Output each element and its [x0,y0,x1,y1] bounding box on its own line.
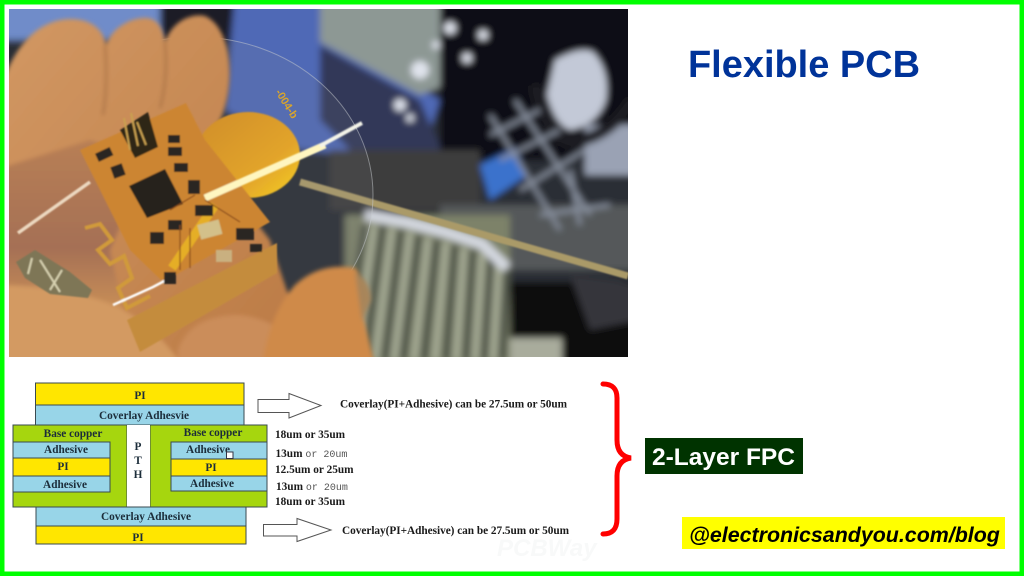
photo: gold circular pad [196,112,300,198]
label: 2-Layer FPC: 2-Layer FPC [652,444,795,471]
photo: hand and fingers [0,15,376,370]
photo: crystal oscillator [197,219,222,240]
right inner stack [171,442,267,491]
layer: top PI: PI [134,390,146,402]
photo: microcontroller chip [129,169,183,218]
layer: left base copper block [13,425,127,507]
photo: diagonal light reflection [205,145,325,198]
layer: bottom PI [36,526,246,544]
photo background: blurred machinery [9,9,628,357]
layer: plated through hole: P [135,441,142,453]
photo: flex PCB body [18,103,362,352]
photo: flexible PCB held in hand [9,9,628,357]
diagram: 2-layer FPC stack-up [13,383,598,562]
thickness labels: 13um or 20um [276,448,347,461]
thickness labels: 18um or 35um [275,429,346,441]
layer: left base copper block: Base copper [44,428,102,440]
right inner stack: Adhesive [190,478,234,490]
layer: plated through hole: H [134,469,143,481]
photo: ring [16,250,92,298]
photo: SMD components [95,135,262,284]
layer: right base copper block [150,425,267,507]
thickness labels: 13um or 20um [276,481,348,494]
watermark: PCBWay [497,535,598,562]
layer: bottom coverlay adhesive: Coverlay Adhesive [101,511,191,523]
left inner stack: Adhesive [43,479,87,491]
right inner stack: PI [205,462,217,474]
arrow: top coverlay [258,394,321,418]
arrow: bottom coverlay [264,518,331,542]
photo: transparent film disc [162,38,374,289]
layer: bottom coverlay adhesive [36,507,246,526]
photo: printed film marking: -004-b [272,87,300,121]
photo: tan rod [300,182,628,276]
left inner stack: PI [57,461,69,473]
label: 2-Layer FPC [645,438,803,474]
thickness labels: 12.5um or 25um [275,464,354,476]
photo: pin header [120,112,158,158]
layer: plated through hole: T [134,455,142,467]
left inner stack: Adhesive [44,444,88,456]
layer: top PI [36,383,244,405]
left inner stack [13,442,110,492]
curly brace [603,384,631,534]
layer: plated through hole [127,425,150,507]
layer: right base copper block: Base copper [184,427,242,439]
thickness labels [275,429,354,508]
note: top coverlay: Coverlay(PI+Adhesive) can be 27.5um or 50um [340,398,568,410]
title: Flexible PCB [688,44,920,86]
note: bottom coverlay: Coverlay(PI+Adhesive) can be 27.5um or 50um [342,525,570,537]
layer: top coverlay adhesive: Coverlay Adhesvie [99,410,189,422]
layer: top coverlay adhesive [36,405,244,425]
thickness labels: 18um or 35um [275,496,346,508]
right inner stack: Adhesive [186,444,230,456]
layer: bottom PI: PI [132,532,144,544]
label: website credit: @electronicsandyou.com/blog [689,523,1000,547]
